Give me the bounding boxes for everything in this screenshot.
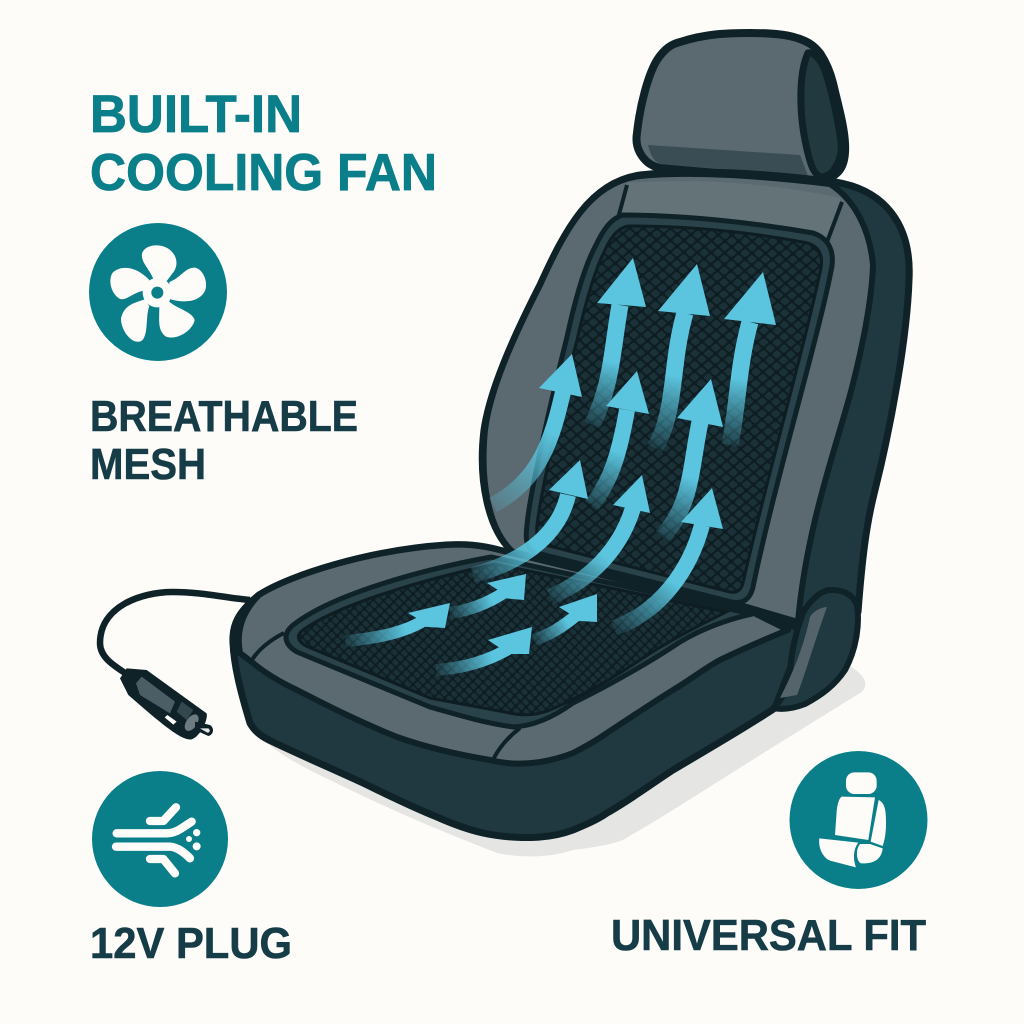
seams <box>617 185 842 242</box>
cable <box>100 592 250 673</box>
label: universal fit: UNIVERSAL FIT <box>611 911 926 960</box>
arrow lower right <box>614 488 723 628</box>
seat mesh panel <box>298 564 726 715</box>
headrest <box>637 33 845 181</box>
title <box>90 85 437 202</box>
seat shadow <box>250 640 865 856</box>
back mesh panel <box>537 226 822 592</box>
title: BUILT-IN <box>90 85 302 144</box>
arrow back row 2 centre <box>592 371 649 505</box>
side hinge <box>773 590 858 709</box>
arrow back row 1 centre <box>655 264 710 448</box>
arrow back row 1 <box>592 258 646 425</box>
icon: fan <box>89 223 227 361</box>
arrow seat 3 <box>436 627 532 670</box>
plug body <box>120 668 213 739</box>
seat cushion <box>233 545 805 838</box>
arrow seat 4 <box>534 594 597 640</box>
arrow back row 2 left <box>493 354 582 505</box>
seat back assembly <box>482 33 909 690</box>
airflow arrows <box>345 258 776 670</box>
arrow back row 2 right <box>662 379 723 537</box>
backrest dark shell <box>482 172 909 690</box>
arrow seat 1 <box>345 603 450 641</box>
12V plug and cable <box>100 592 250 739</box>
arrow back row 1 right <box>724 272 776 445</box>
arrow lower left <box>473 460 588 575</box>
arrow lower centre <box>550 475 650 597</box>
back mesh frame <box>526 215 832 602</box>
icon: universal seat <box>790 751 928 889</box>
label: breathable mesh: BREATHABLE <box>90 392 358 441</box>
arrow seat 2 <box>450 574 526 613</box>
seams <box>252 633 520 760</box>
cushion base <box>233 545 805 838</box>
title: COOLING FAN <box>90 144 437 202</box>
label: breathable mesh: MESH <box>90 440 206 489</box>
backrest gray front <box>484 174 873 622</box>
icon: airflow <box>92 771 228 907</box>
label: breathable mesh <box>90 392 358 489</box>
label: 12V plug: 12V PLUG <box>90 919 292 968</box>
seat mesh frame <box>286 557 752 727</box>
cushion gray top <box>239 545 788 764</box>
